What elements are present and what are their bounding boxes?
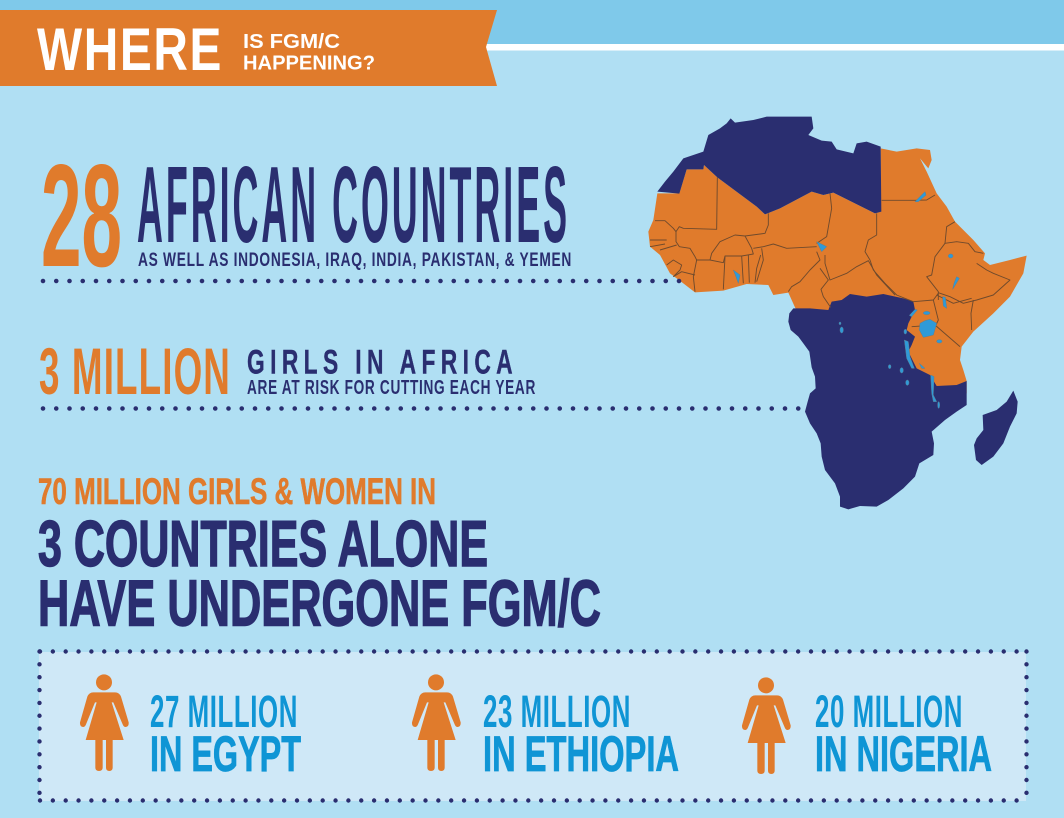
stat: 70 million girls and women: HAVE UNDERGONE FGM/C (38, 566, 601, 640)
header banner: WHERE is FGM/C happening? (0, 10, 497, 86)
stat: 28 African countries (41, 134, 572, 297)
navy southern Africa (788, 294, 1018, 509)
map of Africa (648, 117, 1027, 509)
stat: 70 million girls and women (38, 471, 601, 640)
header banner: WHERE is FGM/C happening?: WHERE (37, 16, 223, 83)
stat: 3 million girls: ARE AT RISK FOR CUTTING EACH YEAR (247, 377, 536, 399)
text: 27 million in Egypt: 27 MILLION (150, 686, 298, 737)
text: 23 million in Ethiopia (483, 686, 679, 782)
stat: 3 million girls (39, 334, 536, 408)
stat: 70 million girls and women: 70 MILLION GIRLS & WOMEN IN (38, 471, 436, 512)
country borders (650, 177, 1010, 347)
stat: 28 African countries: 28 (41, 134, 122, 297)
header banner: WHERE is FGM/C happening?: IS FGM/C (243, 30, 340, 53)
text: 27 million in Egypt (150, 686, 301, 782)
dotted rule 1 (43, 279, 680, 283)
text: 23 million in Ethiopia: IN ETHIOPIA (483, 726, 679, 782)
text: 23 million in Ethiopia: 23 MILLION (483, 686, 631, 737)
stat: 28 African countries: AS WELL AS INDONESIA, IRAQ, INDIA, PAKISTAN, & YEMEN (138, 249, 572, 271)
icon: woman, Ethiopia (412, 674, 461, 771)
Madagascar (974, 391, 1018, 465)
panel: three countries (39, 652, 1027, 801)
orange practising countries (648, 148, 1027, 393)
navy north Africa (657, 117, 881, 214)
stat: 3 million girls: 3 MILLION (39, 334, 231, 408)
icon: woman, Nigeria (742, 677, 791, 774)
dotted rule 2 (43, 406, 804, 411)
icon: woman, Egypt (80, 674, 129, 771)
text: 27 million in Egypt: IN EGYPT (150, 726, 301, 782)
header banner: WHERE is FGM/C happening?: HAPPENING? (243, 52, 375, 74)
lakes (733, 192, 959, 408)
stat: 70 million girls and women: 3 COUNTRIES ALONE (38, 507, 488, 580)
stat: 3 million girls: GIRLS IN AFRICA (247, 344, 518, 382)
text: 20 million in Nigeria (815, 686, 992, 782)
